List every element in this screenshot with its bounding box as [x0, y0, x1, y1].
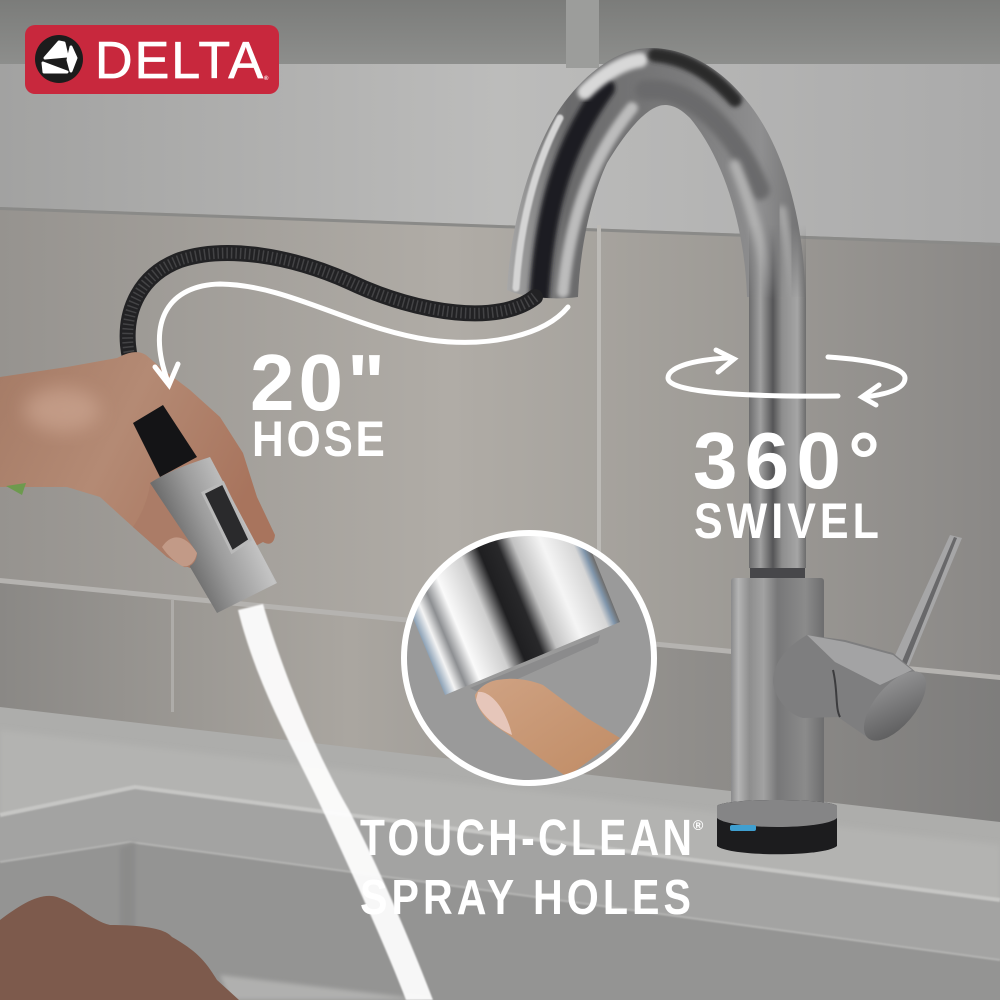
label: 360 swivel — [693, 416, 880, 549]
faucet spout arc — [507, 48, 805, 300]
faucet neck — [749, 225, 806, 580]
thumb — [133, 483, 197, 567]
label: 360 swivel: 360° — [693, 416, 880, 505]
faucet handle — [773, 535, 962, 751]
hand holding sprayer — [0, 352, 277, 613]
icon: Delta logo mark — [35, 35, 83, 83]
sprayer hose connector — [133, 405, 197, 477]
label: 20 inch hose: HOSE — [252, 410, 385, 467]
arrows: swivel — [668, 350, 905, 405]
water stream — [238, 604, 433, 1000]
fingernail — [476, 692, 512, 735]
label: 360 swivel: SWIVEL — [694, 493, 879, 549]
hose — [128, 253, 535, 402]
sprayer head — [150, 457, 277, 613]
arrow: hose length — [155, 284, 568, 385]
faucet body — [717, 578, 837, 854]
label: touch-clean spray holes: TOUCH-CLEAN — [360, 809, 692, 866]
hand highlight — [24, 388, 100, 432]
base ring — [717, 800, 837, 854]
touch indicator light — [730, 825, 756, 831]
logo wordmark: DELTA — [95, 32, 263, 90]
inset: spray holes close-up — [400, 530, 654, 783]
hand at lower left — [0, 896, 239, 1000]
thumbnail — [162, 537, 197, 566]
spray nozzles — [470, 635, 600, 692]
logo: Delta badge — [25, 25, 279, 94]
label: touch-clean spray holes: SPRAY HOLES — [360, 870, 691, 925]
spray head metal — [400, 530, 620, 695]
label: 20 inch hose — [250, 338, 385, 467]
leaf — [6, 483, 26, 495]
logo registered mark: ® — [264, 75, 269, 82]
label: touch-clean spray holes — [360, 809, 704, 925]
label: 20 inch hose: 20" — [250, 338, 385, 427]
label: touch-clean spray holes: ® — [693, 817, 704, 833]
finger — [475, 679, 620, 777]
